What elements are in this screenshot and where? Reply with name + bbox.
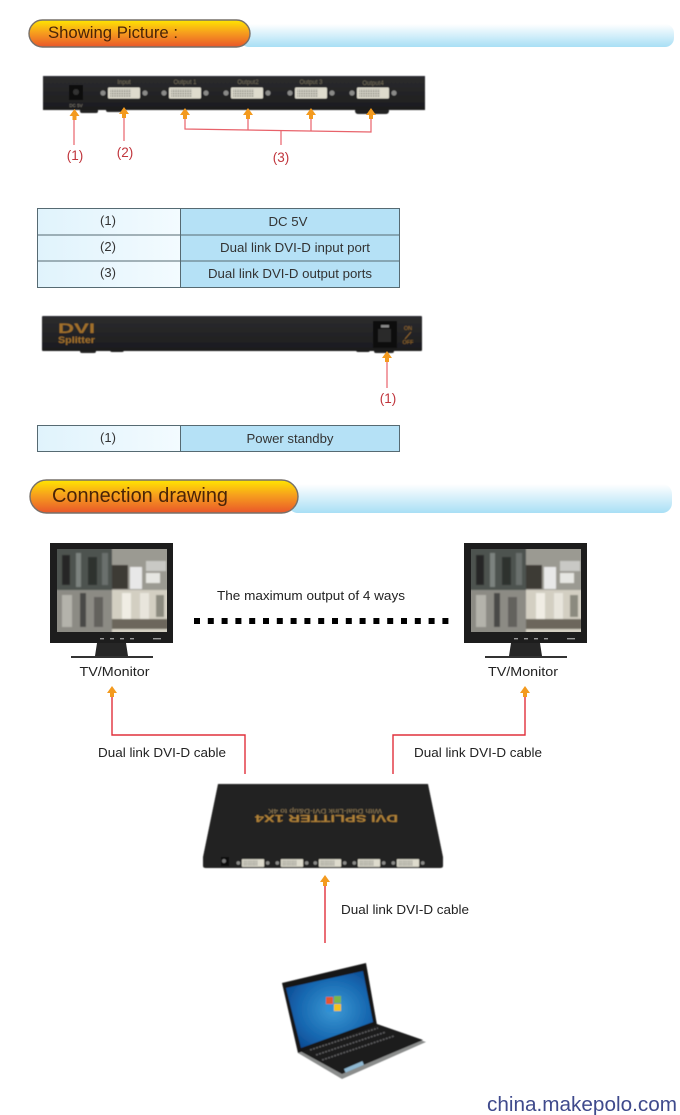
device: rear panel with ports: DC 5V bbox=[69, 103, 83, 108]
heading: Connection drawing bbox=[30, 480, 672, 513]
table: port legend: (3) bbox=[100, 265, 116, 280]
table: port legend: Dual link DVI-D output ports bbox=[208, 266, 373, 281]
table: power standby: (1) bbox=[100, 430, 116, 445]
monitor: left bbox=[50, 543, 173, 679]
table: port legend: DC 5V bbox=[268, 214, 308, 229]
cable: splitter to left monitor bbox=[98, 686, 245, 774]
table: port legend: (1) bbox=[100, 213, 116, 228]
callouts: port arrows and numbers bbox=[67, 107, 376, 165]
device: rear panel with ports: Output2 bbox=[237, 80, 259, 86]
caption: maximum output: The maximum output of 4 ways bbox=[217, 588, 406, 603]
callouts: port arrows and numbers: (3) bbox=[273, 150, 289, 165]
device: front panel with power switch: OFF bbox=[402, 340, 414, 346]
device: front panel with power switch: ON bbox=[404, 326, 412, 332]
table: port legend bbox=[38, 208, 400, 288]
cable: splitter to right monitor bbox=[393, 686, 542, 774]
device: rear panel with ports bbox=[43, 76, 425, 114]
monitor: right: TV/Monitor bbox=[488, 664, 559, 679]
device: DVI splitter 1x4 bbox=[203, 784, 443, 868]
callouts: port arrows and numbers: (1) bbox=[67, 148, 83, 163]
cable: splitter to right monitor: Dual link DVI-D cable bbox=[414, 745, 542, 760]
table: power standby bbox=[38, 426, 400, 452]
heading: Showing Picture bbox=[29, 20, 674, 47]
device: front panel with power switch: Splitter bbox=[58, 335, 96, 345]
cable: laptop to splitter: Dual link DVI-D cable bbox=[341, 902, 469, 917]
device: rear panel with ports: Output4 bbox=[362, 81, 384, 87]
device: rear panel with ports: Output 3 bbox=[299, 80, 323, 86]
device: rear panel with ports: Input bbox=[117, 80, 131, 86]
device: front panel with power switch bbox=[42, 316, 422, 353]
table: port legend: Dual link DVI-D input port bbox=[220, 240, 370, 255]
table: port legend: (2) bbox=[100, 239, 116, 254]
heading: Connection drawing: Connection drawing bbox=[52, 485, 228, 507]
device: DVI splitter 1x4: With Dual-Link DVI-D&up to 4K bbox=[268, 807, 382, 813]
callout: power switch arrow: (1) bbox=[380, 391, 396, 406]
device: DVI splitter 1x4: DVI SPLITTER 1X4 bbox=[254, 812, 398, 823]
cable: splitter to left monitor: Dual link DVI-D cable bbox=[98, 745, 226, 760]
table: power standby: Power standby bbox=[246, 431, 334, 446]
heading: Showing Picture: Showing Picture : bbox=[48, 24, 178, 42]
icon: laptop bbox=[282, 963, 426, 1079]
monitor: right bbox=[464, 543, 587, 679]
dotted line: four outputs bbox=[194, 618, 451, 624]
monitor: left: TV/Monitor bbox=[80, 664, 150, 679]
callouts: port arrows and numbers: (2) bbox=[117, 145, 133, 160]
device: front panel with power switch: DVI bbox=[58, 321, 95, 336]
device: rear panel with ports: Output 1 bbox=[173, 80, 197, 86]
cable: laptop to splitter bbox=[320, 875, 469, 943]
callout: power switch arrow bbox=[380, 351, 396, 406]
